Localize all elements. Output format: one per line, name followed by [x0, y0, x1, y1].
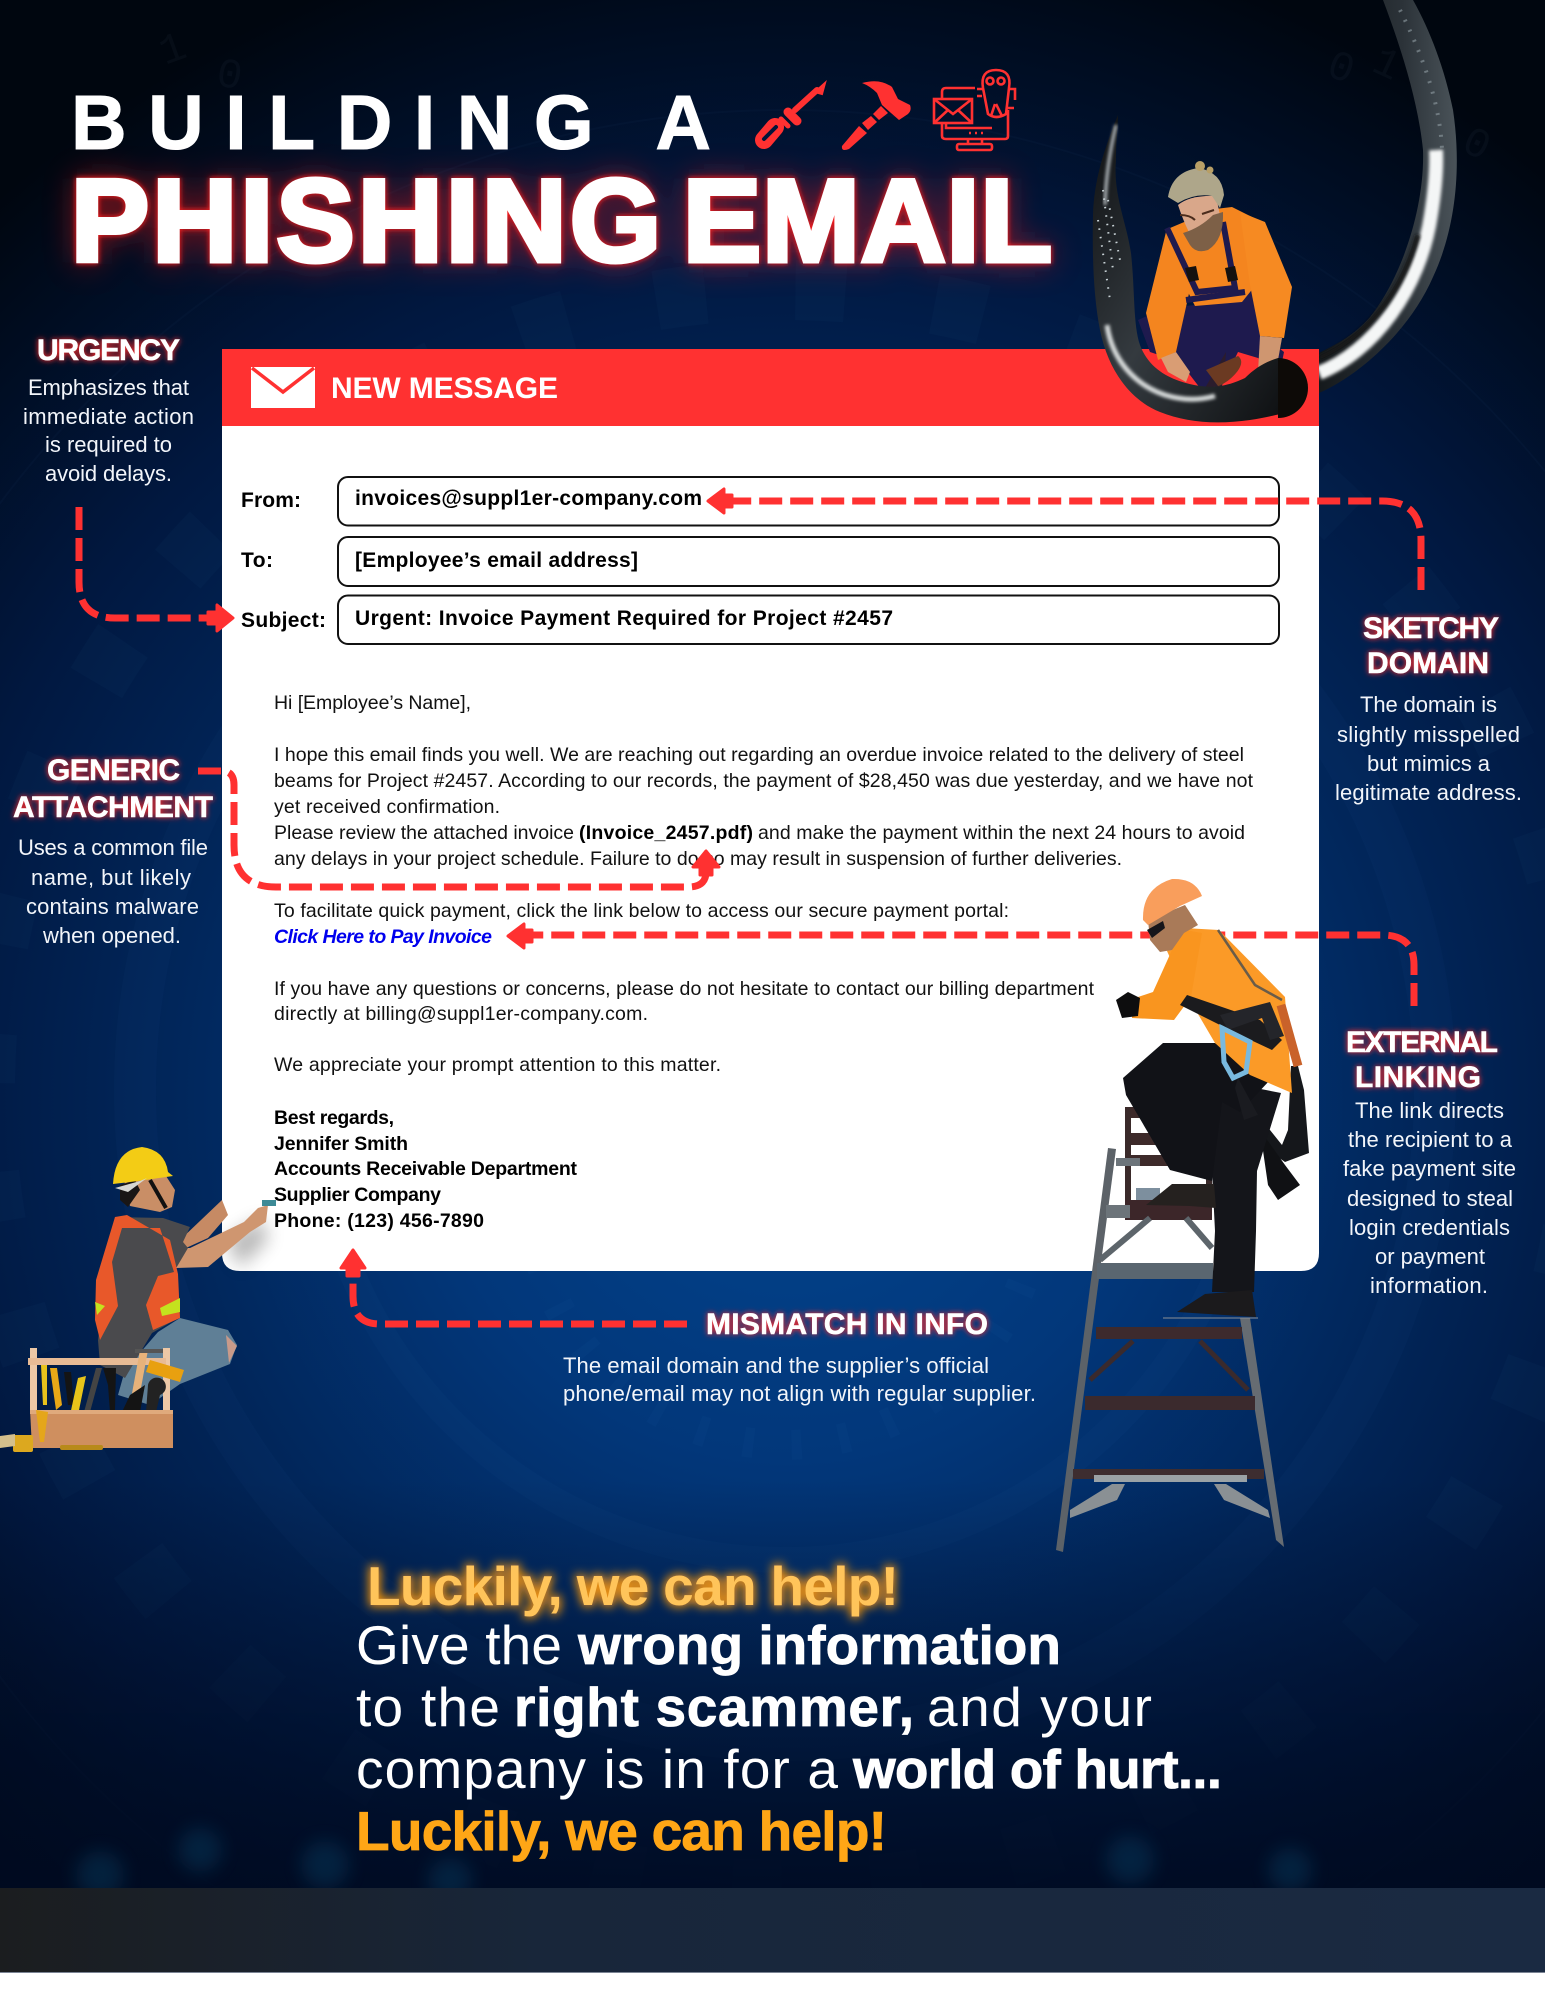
- description: fake payment site: [1343, 1156, 1516, 1181]
- toolbox: [0, 1348, 184, 1452]
- front thigh and shin: [1123, 1043, 1270, 1181]
- email body text: directly at billing@suppl1er-company.com.: [274, 1003, 648, 1025]
- description: The domain is: [1360, 692, 1497, 717]
- background: 1: [1365, 38, 1408, 92]
- title line two: EMAIL: [683, 155, 1052, 286]
- hard hat: [113, 1147, 173, 1184]
- description: [23, 375, 194, 486]
- description: legitimate address.: [1335, 780, 1522, 805]
- field: to: To:: [241, 549, 273, 572]
- description: when opened.: [42, 923, 181, 948]
- email body text: any delays in your project schedule. Failure to do so may result in suspension of further deliveries.: [274, 848, 1122, 870]
- line two: to the: [356, 1676, 500, 1738]
- braces: [1100, 1218, 1212, 1260]
- field: from: From:: [241, 489, 301, 512]
- description: [1343, 1098, 1516, 1298]
- rear leg: [1212, 1080, 1281, 1292]
- orange closing line: Luckily, we can help!: [356, 1800, 887, 1862]
- field: to: [241, 537, 1279, 586]
- arrow: generic attachment: [198, 771, 719, 887]
- description: is required to: [45, 432, 172, 457]
- field: from: invoices@suppl1er-company.com: [355, 487, 702, 510]
- email signature: Phone: (123) 456-7890: [274, 1210, 484, 1232]
- header title: NEW MESSAGE: [331, 372, 558, 405]
- email body text: To facilitate quick payment, click the link below to access our secure payment portal:: [274, 900, 1009, 922]
- shirt: [1167, 928, 1292, 1093]
- email body text: and make the payment within the next 24 hours to avoid: [758, 822, 1245, 844]
- straps: [1167, 222, 1235, 292]
- description: the recipient to a: [1348, 1127, 1513, 1152]
- description: immediate action: [23, 404, 194, 429]
- description: Uses a common file: [18, 835, 208, 860]
- panel: email card: [222, 349, 1319, 1271]
- description: The email domain and the supplier’s official: [563, 1353, 989, 1378]
- arrow: mismatch in info: [341, 1250, 687, 1324]
- arrow: urgency: [79, 507, 233, 631]
- line two: right scammer,: [514, 1676, 914, 1738]
- rails: [1056, 1148, 1116, 1552]
- heading: [1363, 612, 1499, 680]
- email body text: beams for Project #2457. According to our records, the payment of $28,450 was due yesterday, and we have not: [274, 770, 1254, 792]
- heading: SKETCHY: [1363, 612, 1499, 645]
- illustration: climbing worker: [1116, 879, 1309, 1318]
- icon: screwdriver: [764, 83, 825, 140]
- fish hook shank: [1319, 0, 1457, 393]
- heading: LINKING: [1355, 1061, 1481, 1094]
- vest: [95, 1215, 180, 1340]
- fish hook point and bend: [1093, 115, 1308, 422]
- overalls: [1138, 272, 1284, 388]
- description: name, but likely: [31, 865, 191, 890]
- email body text: [274, 692, 1254, 1076]
- illustration: ladder: [1056, 1107, 1284, 1552]
- description: avoid delays.: [45, 461, 172, 486]
- arrow: sketchy domain: [708, 489, 1421, 590]
- callout: external linking: [1343, 1026, 1516, 1298]
- head: [1148, 905, 1198, 952]
- hard hat: [1143, 879, 1202, 925]
- head: [124, 1176, 175, 1212]
- illustration: bearded worker: [1138, 161, 1292, 388]
- arrow: external linking: [508, 924, 1414, 1006]
- field: subject: Subject:: [241, 609, 326, 632]
- description: [18, 835, 208, 948]
- line one: wrong information: [577, 1614, 1061, 1676]
- description: The link directs: [1355, 1098, 1504, 1123]
- email body text: Hi [Employee’s Name],: [274, 692, 471, 714]
- description: contains malware: [26, 894, 199, 919]
- line three: [356, 1738, 1222, 1800]
- heading: URGENCY: [37, 334, 180, 367]
- description: or payment: [1375, 1244, 1485, 1269]
- title line two: [71, 155, 1052, 286]
- hands: [1161, 352, 1190, 382]
- rungs: [1097, 1263, 1213, 1279]
- illustration: kneeling worker with yellow hat: [0, 1147, 276, 1452]
- email body text: Please review the attached invoice: [274, 822, 574, 844]
- description: slightly misspelled: [1337, 722, 1520, 747]
- callout: generic attachment: [13, 754, 213, 948]
- callout: sketchy domain: [1335, 612, 1522, 805]
- field: from: [241, 477, 1279, 526]
- email body text: Click Here to Pay Invoice: [274, 926, 492, 948]
- email body text: (Invoice_2457.pdf): [579, 822, 753, 844]
- background: 0: [1455, 118, 1498, 172]
- field: to: [Employee’s email address]: [355, 549, 638, 572]
- heading: EXTERNAL: [1346, 1026, 1498, 1059]
- rear arm: [180, 1200, 228, 1248]
- heading: [13, 754, 213, 824]
- description: information.: [1370, 1273, 1488, 1298]
- title line two: EMAIL: [683, 155, 1052, 286]
- field: subject: Urgent: Invoice Payment Required for Project #2457: [355, 607, 893, 630]
- callout: mismatch in info: [563, 1308, 1036, 1406]
- heading: ATTACHMENT: [13, 791, 213, 824]
- tape measure and ruler: [13, 1435, 33, 1452]
- heading: MISMATCH IN INFO: [706, 1308, 988, 1341]
- shirt: [98, 1217, 190, 1378]
- seat back: [1125, 1107, 1212, 1217]
- heading: LINKING: [1355, 1061, 1481, 1094]
- line one: [356, 1614, 1061, 1676]
- line three: world of hurt...: [852, 1738, 1222, 1800]
- icon: envelope: [251, 367, 315, 408]
- boots: [1146, 1184, 1216, 1208]
- harness: [1180, 995, 1282, 1050]
- heading: ATTACHMENT: [13, 791, 213, 824]
- line two: [356, 1676, 1152, 1738]
- description: [1335, 692, 1522, 805]
- head: [1178, 196, 1222, 250]
- description: [563, 1353, 1036, 1406]
- email body text: If you have any questions or concerns, please do not hesitate to contact our billing department: [274, 978, 1095, 1000]
- title: [71, 80, 1052, 286]
- heading: EXTERNAL: [1346, 1026, 1498, 1059]
- email signature: Accounts Receivable Department: [274, 1158, 578, 1180]
- heading: DOMAIN: [1367, 647, 1489, 680]
- email body text: I hope this email finds you well. We are reaching out regarding an overdue invoice related to the delivery of steel: [274, 744, 1244, 766]
- closing message: [356, 1555, 1222, 1862]
- title line two: EMAIL: [683, 155, 1052, 286]
- shirt: [1170, 207, 1276, 306]
- jeans: [118, 1318, 237, 1405]
- line one: Give the: [356, 1614, 562, 1676]
- heading: URGENCY: [37, 334, 180, 367]
- email body text: We appreciate your prompt attention to this matter.: [274, 1054, 721, 1076]
- email signature: Supplier Company: [274, 1184, 441, 1206]
- heading: DOMAIN: [1367, 647, 1489, 680]
- glove: [1116, 992, 1140, 1018]
- description: phone/email may not align with regular supplier.: [563, 1381, 1036, 1406]
- footer band: [0, 1888, 1545, 2000]
- background: 0: [213, 51, 246, 102]
- background: 1: [153, 23, 193, 77]
- field: subject: [241, 596, 1279, 644]
- line three: company is in for a: [356, 1738, 838, 1800]
- email signature: Best regards,: [274, 1107, 394, 1129]
- description: login credentials: [1349, 1215, 1510, 1240]
- front arm: [174, 1205, 268, 1268]
- heading: SKETCHY: [1363, 612, 1499, 645]
- heading: MISMATCH IN INFO: [706, 1308, 988, 1341]
- line two: and your: [927, 1676, 1152, 1738]
- description: Emphasizes that: [28, 375, 189, 400]
- card shadow near arm: [226, 1218, 268, 1268]
- glowing headline: Luckily, we can help!: [367, 1555, 899, 1617]
- heading: GENERIC: [47, 754, 180, 787]
- callout: urgency: [23, 334, 194, 486]
- email signature: [274, 1107, 578, 1232]
- glowing headline: Luckily, we can help!: [367, 1555, 899, 1617]
- icon: computer with skull: [934, 70, 1015, 150]
- title line one: BUILDING A: [71, 80, 711, 166]
- email body text: yet received confirmation.: [274, 796, 500, 818]
- email signature: Jennifer Smith: [274, 1133, 408, 1155]
- title line two: PHISHING: [71, 155, 661, 286]
- heading: [1346, 1026, 1498, 1094]
- description: designed to steal: [1347, 1186, 1513, 1211]
- background: 0: [1321, 42, 1361, 96]
- hanging strap: [1240, 1066, 1309, 1162]
- description: but mimics a: [1367, 751, 1491, 776]
- heading: GENERIC: [47, 754, 180, 787]
- title line two: PHISHING: [71, 155, 661, 286]
- title line two: PHISHING: [71, 155, 661, 286]
- icon: hammer: [842, 81, 911, 150]
- email header bar: [222, 349, 1319, 426]
